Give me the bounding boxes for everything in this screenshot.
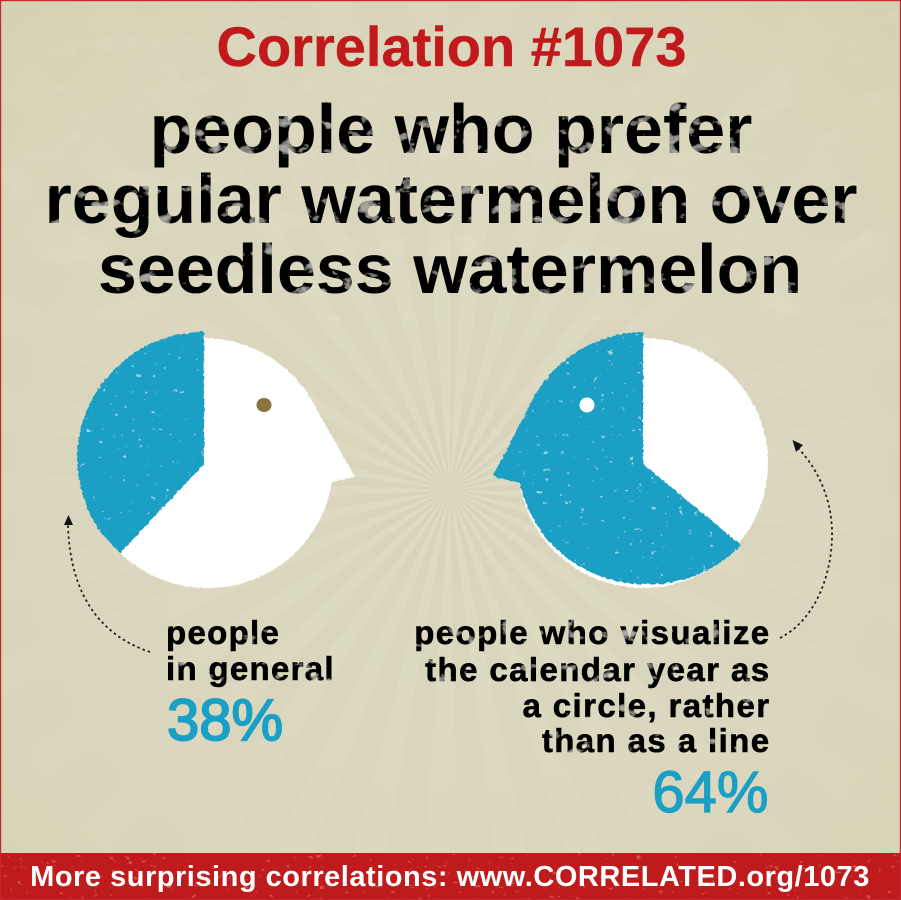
label: people who visualize the calendar year as a circle, rather than as a line: people who visualize	[414, 614, 770, 651]
blue 38 percent slice	[77, 332, 204, 553]
eye	[580, 398, 594, 412]
label: people who visualize the calendar year as a circle, rather than as a line	[414, 614, 770, 759]
eye	[256, 398, 272, 412]
title: Correlation #1073	[217, 15, 686, 78]
label: people in general	[166, 614, 335, 687]
headline	[44, 90, 858, 308]
value: 64 percent: 64%	[652, 760, 768, 825]
arrow: right dotted	[780, 440, 832, 638]
white pie	[518, 338, 768, 588]
label: people who visualize the calendar year as a circle, rather than as a line: a circle, rather	[522, 687, 770, 724]
label: people in general: people	[166, 614, 280, 651]
footer bar	[0, 853, 901, 900]
label: people in general: in general	[166, 650, 335, 687]
headline: regular watermelon over	[44, 160, 858, 238]
footer text: More surprising correlations: www.CORRELATED.org/1073	[30, 861, 870, 893]
white pie head	[120, 338, 355, 588]
pie chart: people who visualize the calendar year as a circle	[493, 332, 768, 588]
label: people who visualize the calendar year as a circle, rather than as a line: than as a line	[542, 722, 770, 759]
value: 38 percent: 38%	[167, 688, 283, 753]
pie chart: people in general	[77, 332, 355, 588]
headline: seedless watermelon	[98, 230, 802, 308]
label: people who visualize the calendar year as a circle, rather than as a line: the calendar year as	[425, 651, 770, 688]
arrow: left dotted	[64, 515, 150, 652]
blue 64 percent slice with beak	[493, 332, 741, 584]
headline: people who prefer	[150, 90, 752, 168]
